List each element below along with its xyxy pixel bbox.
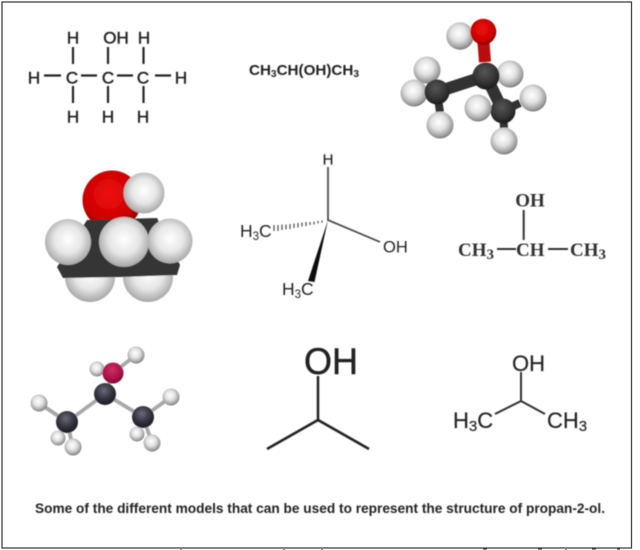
panel: displayed formula: H: [28, 68, 40, 88]
panel: wedge-dash structure: OH: [383, 238, 408, 256]
panel: wedge-dash structure: H: [282, 279, 295, 299]
panel: semi-skeletal formula: C: [477, 408, 493, 433]
panel: displayed formula: [28, 28, 187, 126]
panel: semi-skeletal formula: H: [453, 408, 469, 433]
panel: wedge-dash structure: H: [240, 221, 253, 241]
panel: semi-skeletal formula: 3: [579, 418, 587, 435]
panel: semi-skeletal formula: CH: [547, 408, 579, 433]
panel: displayed formula: H: [67, 108, 79, 126]
panel: semi-skeletal formula: OH: [512, 351, 545, 376]
panel: displayed formula: OH: [103, 28, 129, 48]
panel: displayed formula: H: [138, 28, 150, 48]
panel: displayed formula: H: [102, 108, 114, 126]
panel: displayed formula: H: [175, 68, 187, 88]
panel: serif condensed structure: 3: [486, 247, 494, 263]
panel: skeletal formula: [267, 341, 369, 449]
panel: wedge-dash structure: 3: [295, 289, 301, 301]
panel: condensed formula: CH: [249, 62, 271, 79]
panel: serif condensed structure: CH: [516, 240, 545, 261]
panel: serif condensed structure: 3: [598, 247, 606, 263]
panel: wedge-dash structure: H: [323, 152, 333, 168]
panel: wedge-dash structure: 3: [253, 231, 259, 243]
panel: skeletal formula: OH: [304, 341, 358, 382]
panel: wedge-dash structure: [240, 152, 408, 301]
panel: semi-skeletal formula: 3: [469, 418, 477, 435]
panel: displayed formula: H: [67, 28, 79, 48]
panel: condensed formula: [249, 62, 359, 80]
panel: space-filling model: [45, 170, 192, 302]
panel: condensed formula: 3: [353, 69, 359, 80]
panel: displayed formula: C: [102, 68, 114, 88]
panel: serif condensed structure: CH: [458, 240, 486, 261]
panel: condensed formula: CH(OH)CH: [277, 62, 353, 79]
panel: condensed formula: 3: [271, 69, 277, 80]
panel: displayed formula: H: [137, 108, 149, 126]
panel: serif condensed structure: OH: [515, 190, 545, 212]
panel: serif condensed structure: [458, 190, 606, 263]
panel: displayed formula: C: [137, 68, 149, 88]
caption: Some of the different models that can be used to represent the structure of propan-2-ol.: [35, 500, 605, 516]
panel: small ball and stick model: [30, 346, 180, 456]
panel: semi-skeletal formula: [453, 351, 587, 435]
panel: wedge-dash structure: C: [259, 221, 272, 241]
clipped line of text at bottom edge: [181, 549, 620, 550]
panel: serif condensed structure: CH: [570, 240, 598, 261]
panel: wedge-dash structure: C: [301, 279, 314, 299]
panel: displayed formula: C: [66, 68, 78, 88]
panel: ball and stick model: [400, 19, 546, 155]
